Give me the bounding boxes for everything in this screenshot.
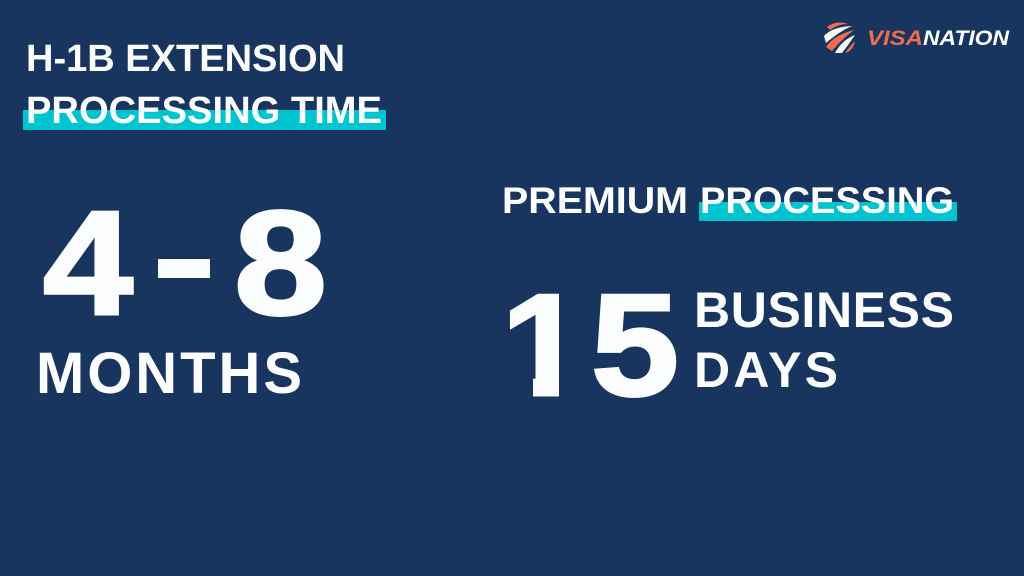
number 8: 8 <box>234 181 327 346</box>
heading line 1: H-1B EXTENSION <box>26 38 345 80</box>
label: days: DAYS <box>694 342 838 398</box>
dash <box>158 259 210 278</box>
logo: VisaNation <box>824 23 1010 53</box>
heading: premium processing <box>502 180 957 221</box>
label: months: MONTHS <box>36 341 302 406</box>
heading word: processing: PROCESSING <box>700 180 954 221</box>
number 5: 5 <box>591 264 679 426</box>
number 1: 1 <box>501 264 587 426</box>
stat: 15 business days <box>510 292 952 398</box>
stat: 4-8 months <box>36 181 327 406</box>
logo wordmark: NATION: NATION <box>923 27 1010 50</box>
icon: striped globe <box>824 23 855 53</box>
logo wordmark: VISA: VISA <box>867 27 923 50</box>
highlight bar <box>699 202 957 221</box>
number 4: 4 <box>43 181 133 346</box>
label: business: BUSINESS <box>694 282 954 338</box>
highlight bar <box>23 110 386 130</box>
heading word: premium: PREMIUM <box>502 180 688 221</box>
heading: H-1B extension processing time <box>23 38 386 132</box>
heading line 2: PROCESSING TIME <box>26 90 382 132</box>
